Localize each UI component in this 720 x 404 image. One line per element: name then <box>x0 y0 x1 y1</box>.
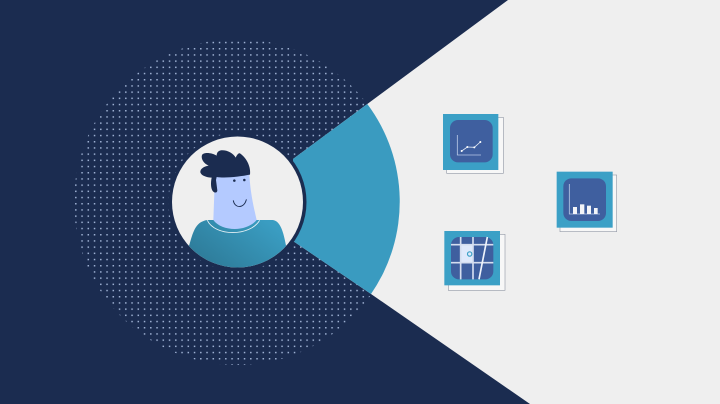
shirt <box>188 220 287 272</box>
teal wedge <box>293 104 400 294</box>
person <box>188 150 287 272</box>
neck and face <box>213 175 257 229</box>
collar <box>207 220 260 233</box>
icon card: line chart <box>443 114 503 173</box>
portrait ring <box>168 133 306 271</box>
portrait <box>168 133 306 272</box>
smile <box>233 200 246 207</box>
hair <box>200 150 250 193</box>
icon card: map <box>444 231 505 290</box>
eyes <box>233 179 236 182</box>
dotted circle <box>75 42 370 365</box>
icon card: bar chart <box>557 172 617 232</box>
portrait background <box>172 136 303 268</box>
light beam panel <box>293 0 720 404</box>
